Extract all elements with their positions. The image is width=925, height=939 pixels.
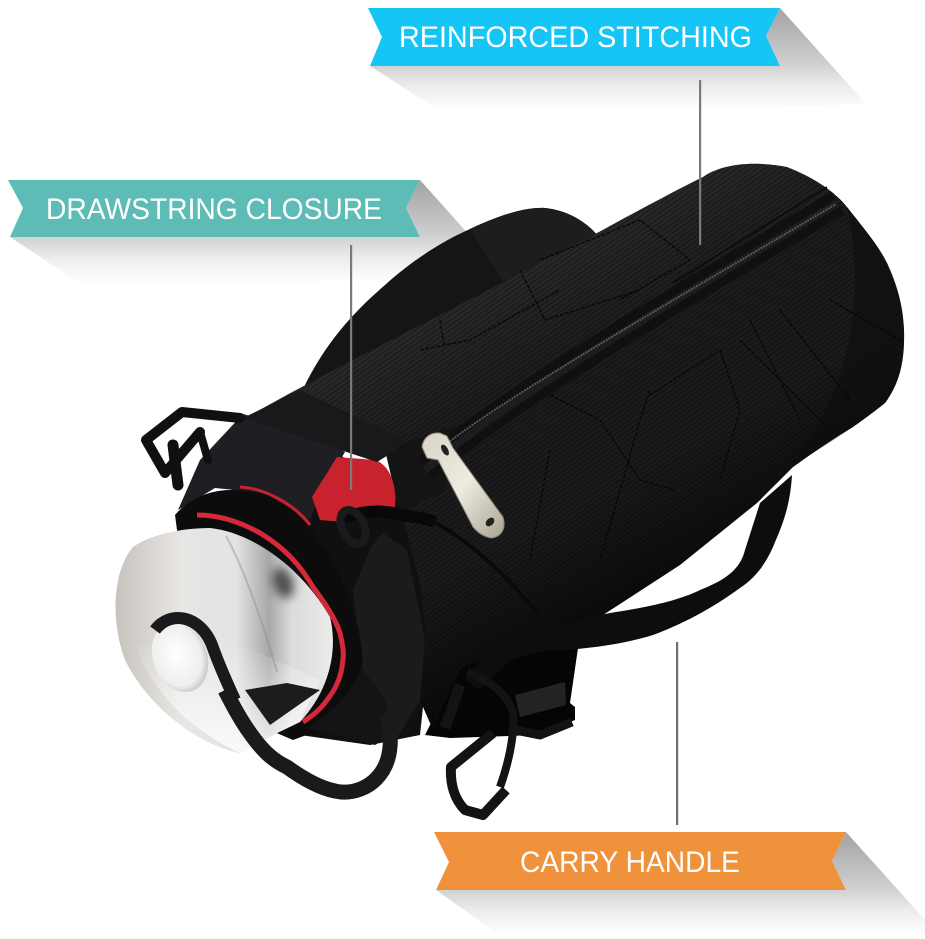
face edge: [226, 536, 277, 672]
banner shadow: drawstring closure: [10, 180, 506, 290]
fabric beside zipper end: [385, 425, 455, 512]
callout line: reinforced stitching: [699, 80, 701, 245]
rear nylon gather: [178, 414, 345, 520]
red bottle cap: [312, 457, 395, 522]
plastic cord loop: [335, 506, 371, 548]
rear plastic clip: [146, 412, 240, 485]
banner: carry handle: CARRY HANDLE: [520, 846, 740, 879]
handle strap: [465, 475, 792, 690]
drawstring cord: [343, 512, 540, 615]
banner: carry handle: [434, 832, 846, 890]
zipper: [422, 187, 838, 538]
banner shadow: carry handle: [436, 832, 925, 939]
front nylon sleeve: [353, 533, 425, 738]
banner shadow: reinforced stitching: [370, 8, 866, 118]
red ring: [197, 515, 343, 722]
banner: reinforced stitching: [368, 8, 780, 66]
dark reflection: [245, 683, 320, 725]
zipper pull: [422, 433, 504, 538]
bottle lid: [116, 487, 392, 792]
dark interior behind lid: [200, 455, 430, 745]
outer red edge: [240, 487, 310, 525]
bag body: [243, 164, 904, 730]
callout line: drawstring closure: [350, 245, 352, 490]
lower shoulder strap: [425, 645, 578, 738]
black gasket ring: [175, 490, 362, 740]
banner: reinforced stitching: REINFORCED STITCHING: [399, 21, 752, 54]
knob: [142, 614, 218, 700]
banner: drawstring closure: [8, 180, 420, 237]
quilted stitching: [420, 220, 900, 560]
loop handle: [155, 618, 390, 792]
handle strut: [305, 668, 392, 745]
right end of bag: [790, 207, 904, 468]
callout line: carry handle: [676, 642, 678, 825]
lower plastic buckle: [445, 672, 572, 815]
silver body: [116, 528, 333, 753]
silver reflection spot: [268, 565, 298, 601]
bag lip over cap: [243, 390, 405, 462]
banner: drawstring closure: DRAWSTRING CLOSURE: [46, 193, 382, 226]
rear shoulder strap: [305, 208, 598, 390]
